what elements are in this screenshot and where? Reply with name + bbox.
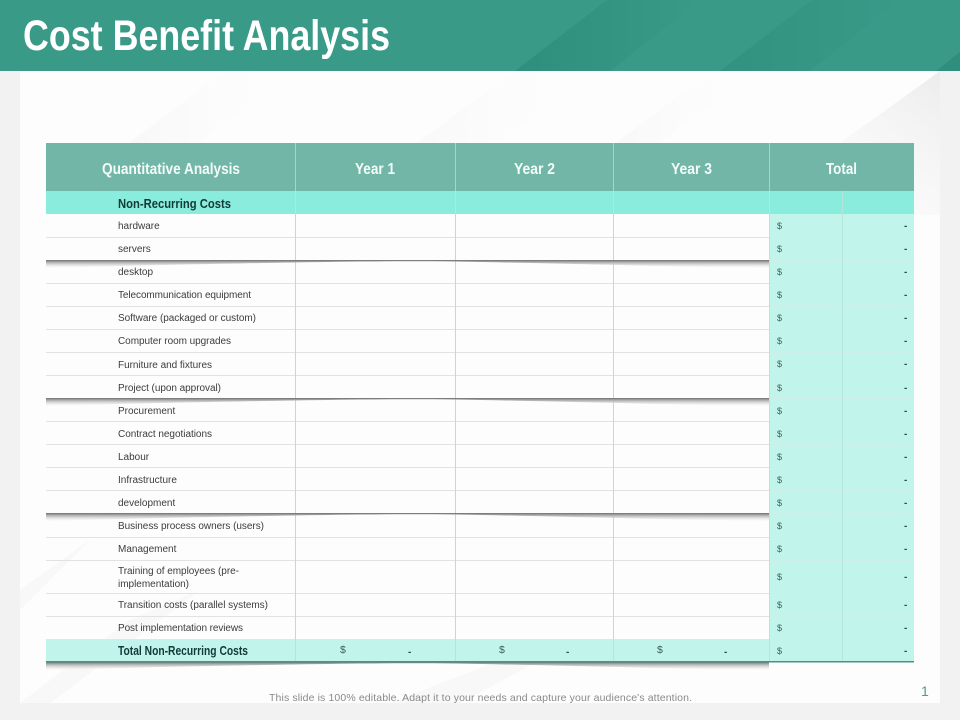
total row: $ — [340, 644, 346, 656]
total column values: - — [904, 452, 907, 463]
total row: - — [904, 646, 907, 657]
total column values: $ — [777, 623, 782, 633]
total column values: $ — [777, 544, 782, 554]
footer note: This slide is 100% editable. Adapt it to your needs and capture your audience's attention. — [269, 692, 692, 704]
row labels: Furniture and fixtures — [118, 360, 212, 371]
total column values: $ — [777, 359, 782, 369]
row labels: Software (packaged or custom) — [118, 313, 256, 324]
table header row — [46, 143, 914, 191]
row labels: Contract negotiations — [118, 429, 212, 440]
total column values: - — [904, 244, 907, 255]
row labels: Business process owners (users) — [118, 521, 264, 532]
total column values: $ — [777, 313, 782, 323]
total column values: - — [904, 429, 907, 440]
total row: Total Non-Recurring Costs — [118, 644, 248, 658]
total column values: $ — [777, 244, 782, 254]
table header row: Total — [826, 161, 857, 178]
total column values: $ — [777, 221, 782, 231]
total column values: - — [904, 290, 907, 301]
total column values: - — [904, 572, 907, 583]
row labels: Project (upon approval) — [118, 383, 221, 394]
total column values: - — [904, 623, 907, 634]
total row: - — [566, 647, 569, 658]
row labels: Procurement — [118, 406, 175, 417]
total column values: $ — [777, 406, 782, 416]
row labels: Telecommunication equipment — [118, 290, 251, 301]
total column values: $ — [777, 572, 782, 582]
row shadow dividers — [46, 260, 914, 670]
row labels: implementation) — [118, 579, 189, 590]
total column values: - — [904, 221, 907, 232]
row and column grid — [46, 143, 914, 662]
row labels: Infrastructure — [118, 475, 177, 486]
row labels — [118, 221, 268, 634]
total column values — [777, 221, 907, 634]
total column values: $ — [777, 267, 782, 277]
total row fill — [46, 639, 769, 662]
header band — [0, 0, 960, 71]
total column values: - — [904, 498, 907, 509]
row labels: Post implementation reviews — [118, 623, 243, 634]
total column values: - — [904, 383, 907, 394]
total column values: $ — [777, 290, 782, 300]
total column values: - — [904, 313, 907, 324]
total column values: - — [904, 600, 907, 611]
total column values: - — [904, 521, 907, 532]
total column values: - — [904, 406, 907, 417]
total column values: $ — [777, 452, 782, 462]
row labels: hardware — [118, 221, 160, 232]
total row: $ — [777, 646, 782, 656]
title: Cost Benefit Analysis — [23, 12, 390, 60]
section row: non-recurring costs — [46, 191, 914, 214]
total column values: $ — [777, 498, 782, 508]
total row: $ — [499, 644, 505, 656]
table header row: Year 2 — [514, 161, 555, 178]
table header row: Year 3 — [671, 161, 712, 178]
total column values: $ — [777, 383, 782, 393]
table header row: Year 1 — [355, 161, 395, 178]
table — [46, 143, 914, 670]
page number: 1 — [921, 683, 929, 699]
row labels: Labour — [118, 452, 150, 463]
total column shading — [769, 214, 914, 662]
total column values: - — [904, 475, 907, 486]
total column values: - — [904, 336, 907, 347]
total column values: $ — [777, 336, 782, 346]
total column values: - — [904, 267, 907, 278]
row labels: Computer room upgrades — [118, 336, 231, 347]
total column values: $ — [777, 521, 782, 531]
table header row: Quantitative Analysis — [102, 161, 240, 178]
row labels: Management — [118, 544, 177, 555]
total row — [118, 644, 907, 658]
total column values: - — [904, 359, 907, 370]
section row: non-recurring costs: Non-Recurring Costs — [118, 197, 231, 211]
total column values: $ — [777, 475, 782, 485]
total column values: $ — [777, 429, 782, 439]
row labels: Training of employees (pre- — [118, 566, 239, 577]
row labels: development — [118, 498, 175, 509]
total row: - — [408, 647, 411, 658]
total column values: $ — [777, 600, 782, 610]
row labels: desktop — [118, 267, 153, 278]
row labels: Transition costs (parallel systems) — [118, 600, 268, 611]
row labels: servers — [118, 244, 151, 255]
total column values: - — [904, 544, 907, 555]
total row: $ — [657, 644, 663, 656]
total row: - — [724, 647, 727, 658]
